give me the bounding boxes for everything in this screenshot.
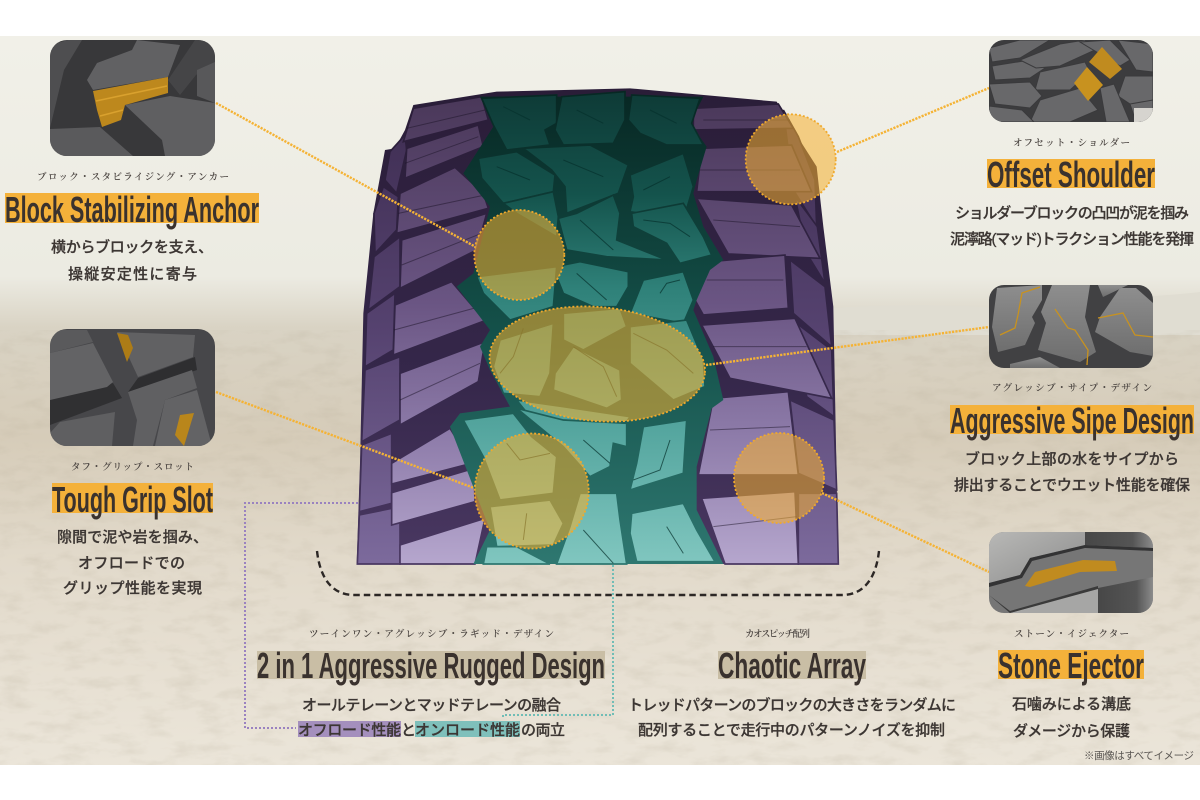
centre tread blocks [463,92,715,564]
ruby: chaotic array: カオスピッチ配列 [745,628,810,640]
description: off-road and on-road performance: オフロード性能 [298,722,401,739]
dashed bracket under tread [317,551,879,595]
description: chaotic array [628,696,956,739]
highlight: offset shoulder area [746,114,836,204]
thumbnail: stone ejector [989,532,1153,613]
highlight: block stabilizing anchor area [474,210,564,300]
heading: chaotic array: Chaotic Array [718,645,866,686]
highlight: chaotic array area [485,298,710,430]
heading: tough grip slot [52,479,213,520]
lug sipes [394,110,807,527]
description: block stabilizing anchor [51,238,213,283]
description: off-road and on-road performance: の両立 [521,722,565,739]
description: chaotic array: 配列することで走行中のパターンノイズを抑制 [638,721,945,739]
highlight: stone ejector area [734,433,824,523]
ruby: tough grip slot: タフ・グリップ・スロット [71,461,194,473]
centre block sipes [497,107,693,563]
ruby: offset shoulder: オフセット・ショルダー [1013,138,1130,149]
description: tough grip slot: 隙間で泥や岩を掴み、 [57,529,208,546]
description: tough grip slot [57,529,208,597]
leader line: stone ejector [822,493,989,572]
description: off-road and on-road performance: と [401,722,416,739]
panel: block stabilizing anchor [5,40,259,283]
ruby: 2 in 1 design: ツーインワン・アグレッシブ・ラギッド・デザイン [309,628,554,640]
description: off-road and on-road performance: オンロード性能 [415,722,520,739]
heading: 2 in 1 design [257,645,605,686]
description: tough grip slot: グリップ性能を実現 [63,580,202,597]
panel: aggressive sipe design [950,285,1194,494]
heading: tough grip slot: Tough Grip Slot [52,479,213,520]
panel: tough grip slot [50,329,215,597]
leader line: offset shoulder [837,88,989,152]
description: stone ejector: 石噛みによる溝底 [1012,695,1131,713]
description: offset shoulder: 泥濘路(マッド)トラクション性能を発揮 [950,230,1194,248]
panel: chaotic array [628,628,956,739]
thumbnail: block stabilizing anchor [50,40,215,156]
thumbnail: tough grip slot [50,329,215,446]
description: aggressive sipe design: 排出することでウエット性能を確保 [954,477,1190,494]
leader line: block stabilizing anchor [216,103,474,246]
ruby: aggressive sipe design: アグレッシブ・サイプ・デザイン [992,382,1152,394]
tire tread [357,88,838,564]
on-road teal centre band [450,97,723,564]
description: aggressive sipe design: ブロック上部の水をサイプから [965,450,1179,468]
panel: stone ejector [989,532,1153,740]
heading: 2 in 1 design: 2 in 1 Aggressive Rugged Design [257,645,605,686]
description: offset shoulder: ショルダーブロックの凸凹が泥を掴み [955,204,1189,222]
thumbnail: aggressive sipe design [989,285,1153,368]
description: block stabilizing anchor: 操縦安定性に寄与 [68,266,197,283]
heading: block stabilizing anchor: Block Stabilizing Anchor [5,189,259,230]
panel: offset shoulder [950,40,1194,248]
description: stone ejector: ダメージから保護 [1013,722,1130,740]
callout: off-road zone connector [245,503,358,728]
highlight: tough grip slot area [475,434,589,548]
ruby: block stabilizing anchor: ブロック・スタビライジング・アンカー [37,171,229,183]
description: offset shoulder [950,204,1194,248]
description: block stabilizing anchor: 横からブロックを支え、 [51,238,213,256]
callout: on-road zone connector [503,565,613,718]
description: stone ejector [1012,695,1131,740]
outer shoulder blocks [357,110,838,564]
description: tough grip slot: オフロードでの [78,555,185,572]
description: fusion of terrain types: オールテレーンとマッドテレーンの融合 [302,697,561,714]
footnote: ※画像はすべてイメージ [1084,749,1194,762]
leader line: tough grip slot [216,392,474,488]
description: off-road and on-road performance [298,721,565,739]
leader line: aggressive sipe design [706,327,989,365]
description: aggressive sipe design [954,450,1190,494]
thumbnail: offset shoulder [989,40,1153,122]
heading: chaotic array [718,645,866,686]
heading: block stabilizing anchor [5,189,259,230]
off-road purple shoulder lugs [392,97,832,564]
ruby: stone ejector: ストーン・イジェクター [1014,628,1129,640]
description: chaotic array: トレッドパターンのブロックの大きさをランダムに [628,696,956,714]
panel: 2 in 1 aggressive rugged design [257,628,605,739]
tire body silhouette [357,88,838,564]
